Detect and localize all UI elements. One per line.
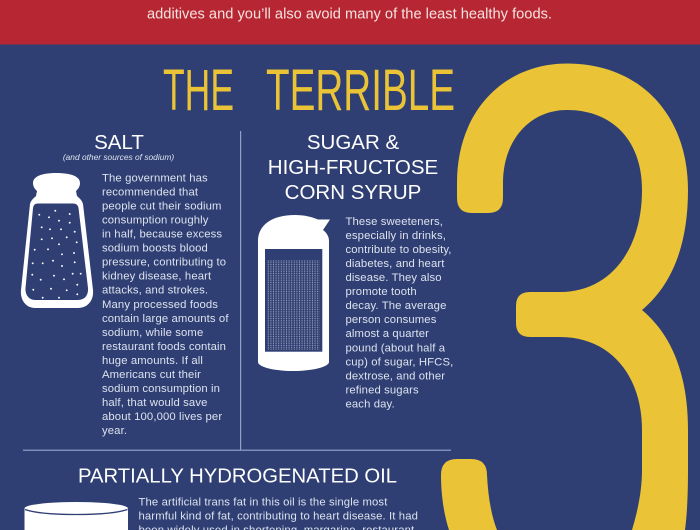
heading: salt: SALT	[94, 131, 144, 154]
header banner	[0, 0, 700, 44]
body text: salt: year.	[102, 425, 127, 437]
body text: sugar: cup) of sugar, HFCS,	[346, 356, 453, 368]
giant numeral 3	[441, 64, 688, 530]
body text: oil	[138, 496, 418, 530]
horizontal divider	[23, 450, 451, 451]
panel: partially hydrogenated oil	[24, 464, 418, 530]
body text: salt: half, that would save	[102, 397, 208, 409]
body text: salt: sodium boosts blood	[102, 243, 208, 255]
body text: oil: harmful kind of fat, contributing to heart disease. It had	[138, 510, 418, 522]
body text: sugar: almost a quarter	[346, 328, 429, 340]
body text: sugar: promote tooth	[346, 286, 417, 298]
body text: salt: consumption roughly	[102, 215, 209, 227]
body text: salt: recommended that	[102, 186, 199, 198]
body text: sugar	[346, 216, 453, 410]
title: TERRIBLE	[266, 58, 455, 123]
body text: salt: in half, because excess	[102, 229, 222, 241]
body text: oil: The artificial trans fat in this oil is the single most	[138, 496, 388, 508]
body text: sugar: contribute to obesity,	[346, 244, 452, 256]
icon: sugar canister	[258, 215, 330, 371]
body text: sugar: diabetes, and heart	[346, 258, 445, 270]
body text: salt: about 100,000 lives per	[102, 411, 222, 423]
heading: sugar: HIGH-FRUCTOSE	[268, 156, 438, 179]
heading: sugar	[268, 131, 438, 204]
icon: oil container	[24, 502, 128, 530]
body text: salt: attacks, and strokes.	[102, 285, 208, 297]
body text: salt: restaurant foods contain	[102, 341, 226, 353]
body text: sugar: These sweeteners,	[346, 216, 443, 228]
body text: sugar: each day.	[346, 398, 395, 410]
heading: oil: PARTIALLY HYDROGENATED OIL	[78, 464, 397, 488]
body text: sugar: pound (about half a	[346, 342, 446, 354]
title: THE	[163, 58, 234, 123]
body text: salt	[102, 172, 229, 437]
body text: salt: sodium consumption in	[102, 383, 220, 395]
body text: salt: Many processed foods	[102, 299, 218, 311]
subheading: salt: (and other sources of sodium)	[63, 152, 174, 162]
body text: sugar: dextrose, and other	[346, 370, 445, 382]
body text: salt: contain large amounts of	[102, 313, 229, 325]
header text: additives and you’ll also avoid many of the least healthy foods.	[147, 6, 552, 22]
title	[163, 58, 455, 123]
icon: salt shaker	[21, 173, 93, 308]
heading: sugar: SUGAR &	[307, 131, 399, 154]
panel: salt	[21, 131, 229, 437]
heading: sugar: CORN SYRUP	[285, 181, 421, 204]
body text: sugar: especially in drinks,	[346, 230, 446, 242]
body text: sugar: disease. They also	[346, 272, 442, 284]
body text: salt: Americans cut their	[102, 369, 201, 381]
body text: salt: huge amounts. If all	[102, 355, 203, 367]
body text: salt: The government has	[102, 172, 208, 184]
body text: salt: kidney disease, heart	[102, 271, 212, 283]
body text: sugar: refined sugars	[346, 384, 419, 396]
body text: salt: pressure, contributing to	[102, 257, 226, 269]
panel: sugar	[258, 131, 453, 410]
body text: salt: people cut their sodium	[102, 201, 222, 213]
body text: sugar: person consumes	[346, 314, 437, 326]
vertical divider	[240, 131, 241, 450]
body text: salt: sodium, while some	[102, 327, 203, 339]
body text: sugar: decay. The average	[346, 300, 446, 312]
